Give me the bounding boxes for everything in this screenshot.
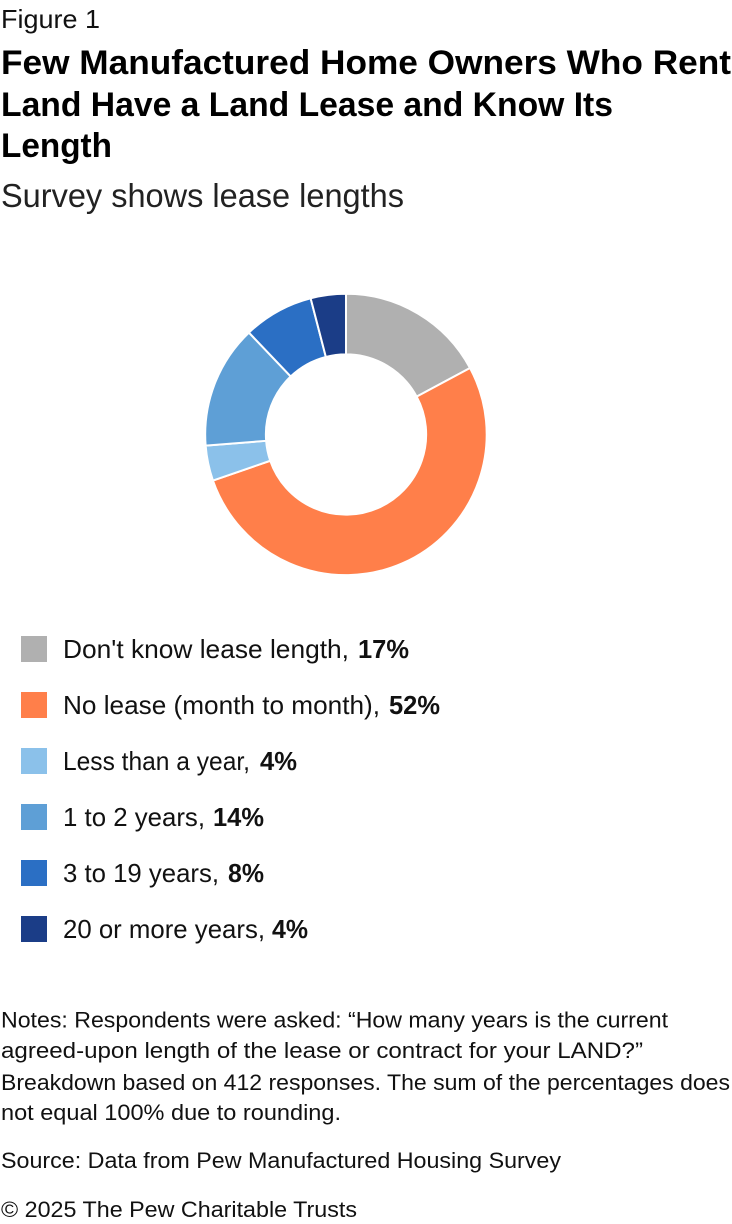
legend item: 20 or more years: 20 or more years,	[63, 914, 265, 944]
legend item: 3 to 19 years: 8%	[228, 858, 264, 888]
legend item: don't know lease length: 17%	[358, 634, 409, 664]
legend item: 3 to 19 years: 3 to 19 years,	[63, 858, 219, 888]
notes	[1, 1008, 730, 1125]
segment: less than a year 4%	[206, 441, 270, 481]
legend item: no lease: No lease (month to month),	[63, 690, 380, 720]
legend item: 3 to 19 years	[21, 858, 264, 888]
segment: 1 to 2 years 14%	[205, 333, 291, 446]
segment: don't know lease length 17%	[346, 294, 470, 397]
legend item: no lease: 52%	[389, 690, 440, 720]
notes: agreed-upon length of the lease or contract for your LAND?”	[1, 1038, 643, 1063]
title: Land Have a Land Lease and Know Its	[1, 86, 613, 124]
legend item: don't know lease length: Don't know lease length,	[63, 634, 349, 664]
legend item: 1 to 2 years: 1 to 2 years,	[63, 802, 205, 832]
subtitle: Survey shows lease lengths	[1, 177, 404, 214]
title	[1, 44, 731, 165]
legend item: 20 or more years: 4%	[272, 914, 308, 944]
notes: Notes: Respondents were asked: “How many years is the current	[1, 1008, 669, 1032]
notes: not equal 100% due to rounding.	[1, 1100, 341, 1125]
title: Length	[1, 127, 112, 165]
legend item: 1 to 2 years: 14%	[213, 802, 264, 832]
segment: 3 to 19 years 8%	[249, 298, 326, 376]
title: Few Manufactured Home Owners Who Rent	[1, 44, 731, 82]
legend	[21, 634, 440, 944]
notes: Breakdown based on 412 responses. The sum of the percentages does	[1, 1070, 730, 1095]
copyright: © 2025 The Pew Charitable Trusts	[1, 1197, 357, 1222]
source: Source: Data from Pew Manufactured Housing Survey	[1, 1148, 562, 1173]
figure label: Figure 1	[1, 4, 100, 34]
legend item: less than a year: 4%	[260, 746, 297, 776]
segment: no lease 52%	[213, 368, 487, 575]
legend item: 1 to 2 years	[21, 802, 264, 832]
legend item: less than a year: Less than a year,	[63, 746, 250, 776]
segment: 20 or more years 4%	[311, 294, 346, 357]
donut chart	[205, 294, 487, 575]
